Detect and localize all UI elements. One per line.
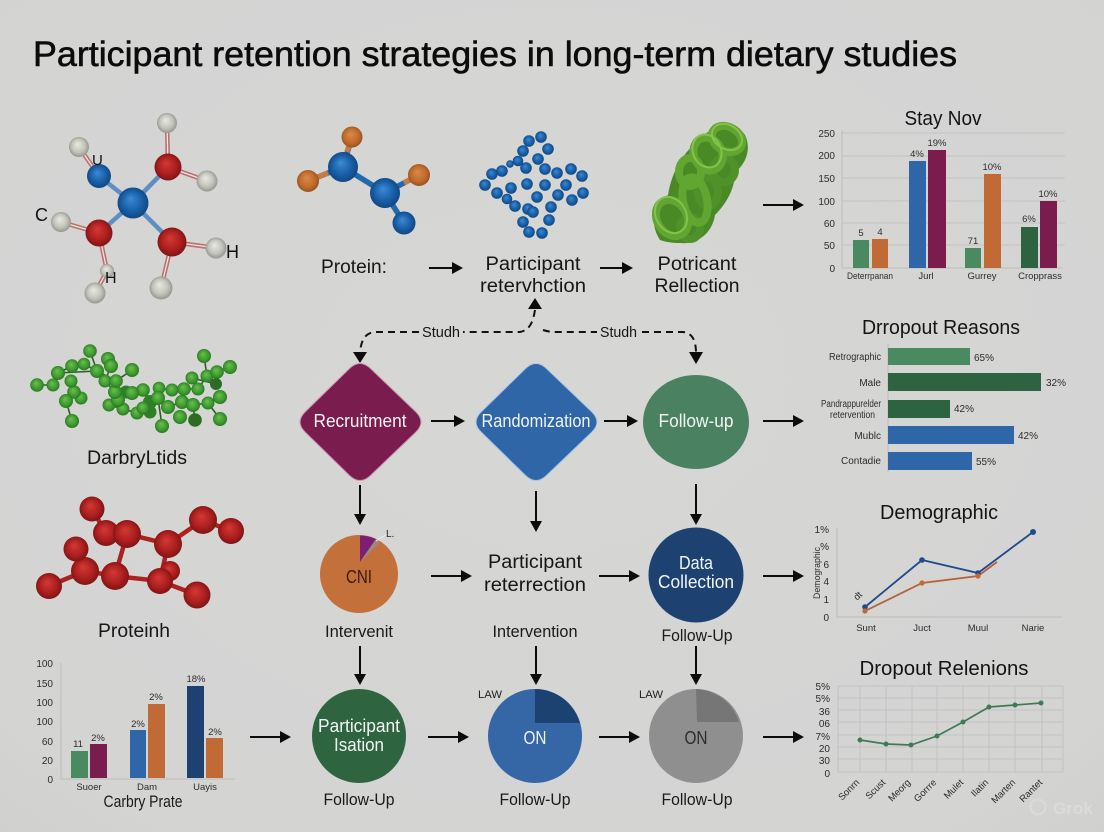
title: Participant retention strategies in long-term dietary studies bbox=[33, 35, 957, 74]
arrow: recruitment to randomization bbox=[431, 415, 465, 427]
flow node: Recruitment diamond: Recruitment bbox=[314, 411, 406, 431]
arrow: to Dropout Reasons chart bbox=[763, 415, 804, 427]
chart: Stay Nov grouped bars: Deterrpanan bbox=[847, 271, 893, 282]
label: Participant retervhction: retervhction bbox=[480, 276, 586, 297]
arrow: bar chart to participant isation bbox=[250, 731, 291, 743]
arrow: pie to participant bbox=[431, 570, 472, 582]
label: Participant retervhction: Participant bbox=[486, 254, 581, 275]
chart: Demographic line chart: dt bbox=[852, 589, 865, 603]
chart: Demographic line chart: Narie bbox=[1022, 623, 1044, 634]
pie chart: ON blue: LAW bbox=[478, 689, 503, 701]
chart: Dropout Relenions line chart: Dropout Relenions bbox=[860, 658, 1028, 680]
label: Follow-Up under data collection: Follow-Up bbox=[662, 626, 732, 645]
chart: Dropout Reasons horizontal bars: retervention bbox=[830, 410, 875, 421]
icon: small molecule with blue, red and grey atoms: U bbox=[92, 152, 103, 169]
pie chart: CNI: L. bbox=[386, 529, 394, 540]
chart: Stay Nov grouped bars: 10% bbox=[1038, 189, 1058, 200]
icon: small molecule with blue, red and grey atoms: H bbox=[226, 242, 239, 262]
chart: Stay Nov grouped bars: 50 bbox=[824, 241, 835, 252]
chart: Demographic line chart: Demographic bbox=[880, 502, 998, 524]
flow node: Follow-up ellipse bbox=[643, 375, 749, 469]
chart: Demographic line chart: Juct bbox=[913, 623, 931, 634]
flow node: Participant Isation circle bbox=[312, 689, 406, 783]
icon: protein molecule blue and orange bbox=[297, 126, 430, 234]
chart: Carbry Prate grouped bars: 2% bbox=[149, 692, 163, 703]
chart: Stay Nov grouped bars: Stay Nov bbox=[904, 108, 982, 130]
chart: Stay Nov grouped bars: 10% bbox=[982, 162, 1002, 173]
chart: Carbry Prate grouped bars: 2% bbox=[91, 733, 105, 744]
pie chart: CNI: CNI bbox=[346, 567, 372, 587]
label: Potricant Rellection: Rellection bbox=[654, 276, 740, 297]
chart: Dropout Relenions line chart: 5% bbox=[816, 694, 830, 705]
flow node: Data Collection circle bbox=[648, 528, 744, 622]
flow node: Follow-up ellipse: Follow-up bbox=[658, 411, 734, 431]
chart: Dropout Relenions line chart: Scust bbox=[864, 777, 888, 802]
icon: red molecule bbox=[36, 496, 244, 608]
chart: Carbry Prate grouped bars: 150 bbox=[36, 679, 53, 690]
chart: Dropout Relenions line chart bbox=[816, 658, 1063, 806]
arrow: to Stay Nov chart bbox=[763, 199, 804, 211]
arrow: blue pie to grey pie bbox=[599, 731, 640, 743]
icon: small molecule with blue, red and grey atoms bbox=[35, 113, 239, 304]
chart: Stay Nov grouped bars: 6% bbox=[1022, 214, 1036, 225]
pie chart: ON blue: ON bbox=[524, 728, 546, 748]
chart: Dropout Relenions line chart: 36 bbox=[819, 707, 830, 718]
chart: Carbry Prate grouped bars: 100 bbox=[36, 659, 53, 670]
chart: Dropout Relenions line chart: 7% bbox=[816, 732, 830, 743]
chart: Stay Nov grouped bars: 71 bbox=[968, 236, 978, 247]
chart: Dropout Reasons horizontal bars: Drropout Reasons bbox=[862, 317, 1020, 339]
chart: Dropout Relenions line chart: Mulet bbox=[942, 777, 966, 802]
chart: Dropout Relenions line chart: 06 bbox=[819, 719, 830, 730]
chart: Carbry Prate grouped bars: 2% bbox=[208, 727, 222, 738]
chart: Stay Nov grouped bars: 4 bbox=[877, 227, 883, 238]
chart: Demographic line chart: % bbox=[820, 542, 829, 553]
chart: Stay Nov grouped bars: Cropprass bbox=[1018, 271, 1062, 282]
chart: Demographic line chart: Sunt bbox=[856, 623, 876, 634]
chart: Dropout Relenions line chart: 20 bbox=[819, 744, 830, 755]
arrow: follow-up down bbox=[690, 484, 702, 525]
chart: Demographic line chart bbox=[812, 502, 1062, 634]
icon: small molecule with blue, red and grey atoms: C bbox=[35, 205, 48, 225]
chart: Dropout Reasons horizontal bars bbox=[821, 317, 1066, 472]
label: Proteinh: Proteinh bbox=[98, 621, 170, 642]
chart: Demographic line chart: 0 bbox=[823, 613, 829, 624]
flow node: Participant Isation circle: Participant bbox=[318, 716, 400, 736]
arrow: intervention down bbox=[530, 646, 542, 685]
arrow: intervenit down bbox=[354, 646, 366, 685]
chart: Dropout Reasons horizontal bars: 42% bbox=[1018, 431, 1038, 442]
label: Potricant Rellection: Potricant bbox=[658, 254, 737, 275]
flow node: Randomization diamond bbox=[476, 364, 597, 480]
arrow: randomization down bbox=[530, 491, 542, 532]
label: DarbryLtids: DarbryLtids bbox=[87, 448, 187, 469]
chart: Stay Nov grouped bars: 4% bbox=[910, 149, 924, 160]
chart: Stay Nov grouped bars: Jurl bbox=[918, 271, 934, 282]
chart: Dropout Reasons horizontal bars: 65% bbox=[974, 353, 994, 364]
chart: Demographic line chart: 6 bbox=[823, 560, 829, 571]
arrow: isation to blue pie bbox=[428, 731, 469, 743]
chart: Dropout Reasons horizontal bars: Mublc bbox=[854, 431, 881, 442]
chart: Dropout Reasons horizontal bars: 42% bbox=[954, 404, 974, 415]
chart: Carbry Prate grouped bars bbox=[36, 659, 235, 811]
flow node: Recruitment diamond bbox=[300, 364, 421, 480]
icon: green molecule cluster bbox=[30, 344, 237, 433]
chart: Demographic line chart: 1 bbox=[823, 595, 829, 606]
connector: dashed study links: Studh bbox=[600, 324, 637, 341]
chart: Dropout Reasons horizontal bars: Contadie bbox=[841, 456, 881, 467]
flow node: Data Collection circle: Collection bbox=[658, 572, 734, 592]
chart: Dropout Reasons horizontal bars: Pandrappurelder bbox=[821, 399, 882, 410]
label: Protein: Protein: bbox=[321, 257, 387, 278]
arrow: to Dropout Relenions chart bbox=[763, 731, 804, 743]
flow node: Participant Isation circle: Isation bbox=[334, 735, 384, 755]
arrow: protein to participant bbox=[429, 262, 463, 274]
chart: Carbry Prate grouped bars: 0 bbox=[47, 775, 53, 786]
chart: Carbry Prate grouped bars: 18% bbox=[186, 674, 206, 685]
chart: Demographic line chart: Demographic bbox=[812, 547, 823, 599]
chart: Demographic line chart: 1% bbox=[815, 525, 829, 536]
chart: Carbry Prate grouped bars: Uayis bbox=[193, 782, 217, 793]
chart: Dropout Reasons horizontal bars: 55% bbox=[976, 457, 996, 468]
pie chart: CNI bbox=[320, 529, 398, 613]
chart: Dropout Relenions line chart: 0 bbox=[824, 769, 830, 780]
chart: Dropout Reasons horizontal bars: Male bbox=[859, 378, 881, 389]
flow node: Data Collection circle: Data bbox=[679, 553, 714, 573]
label: Follow-Up left: Follow-Up bbox=[324, 790, 394, 809]
arrow: participant to data collection bbox=[599, 570, 640, 582]
chart: Stay Nov grouped bars: 100 bbox=[818, 197, 835, 208]
chart: Stay Nov grouped bars: 200 bbox=[818, 151, 835, 162]
arrow: follow-up down to grey circle bbox=[690, 646, 702, 685]
chart: Stay Nov grouped bars: 250 bbox=[818, 129, 835, 140]
label: Follow-Up middle: Follow-Up bbox=[500, 790, 570, 809]
chart: Carbry Prate grouped bars: 60 bbox=[42, 737, 53, 748]
chart: Dropout Relenions line chart: Gorrre bbox=[912, 777, 939, 805]
icon: blue dotted chain bbox=[479, 131, 589, 239]
chart: Stay Nov grouped bars: 5 bbox=[858, 228, 864, 239]
chart: Dropout Relenions line chart: Marten bbox=[989, 777, 1018, 806]
label: Intervention: Intervention bbox=[492, 622, 578, 641]
chart: Demographic line chart: Muul bbox=[968, 623, 988, 634]
label: Participant reterrection: reterrection bbox=[484, 575, 586, 596]
icon: small molecule with blue, red and grey atoms: H bbox=[105, 270, 117, 287]
connector: dashed study links: Studh bbox=[422, 324, 460, 341]
flow node: Randomization diamond: Randomization bbox=[482, 411, 590, 431]
chart: Stay Nov grouped bars: 60 bbox=[824, 219, 835, 230]
chart: Stay Nov grouped bars: Gurrey bbox=[967, 271, 997, 282]
chart: Carbry Prate grouped bars: 100 bbox=[36, 698, 53, 709]
connector: dashed study links bbox=[353, 298, 703, 364]
label: Follow-Up right: Follow-Up bbox=[662, 790, 732, 809]
chart: Dropout Reasons horizontal bars: Retrographic bbox=[829, 352, 881, 363]
label: Intervenit: Intervenit bbox=[325, 622, 393, 641]
arrow: participant to potricant bbox=[600, 262, 633, 274]
pie chart: ON grey: LAW bbox=[639, 689, 664, 701]
chart: Carbry Prate grouped bars: 20 bbox=[42, 756, 53, 767]
watermark: Grok bbox=[1030, 799, 1093, 818]
chart: Stay Nov grouped bars: 150 bbox=[818, 174, 835, 185]
chart: Dropout Relenions line chart: Ilatin bbox=[969, 777, 991, 799]
icon: green coiled protein bbox=[649, 119, 748, 243]
label: Participant reterrection: Participant bbox=[488, 552, 583, 573]
chart: Dropout Relenions line chart: 30 bbox=[819, 756, 830, 767]
pie chart: ON grey: ON bbox=[684, 728, 708, 748]
arrow: recruitment down bbox=[354, 485, 366, 525]
chart: Carbry Prate grouped bars: 100 bbox=[36, 717, 53, 728]
chart: Dropout Relenions line chart: Rantet bbox=[1018, 777, 1045, 805]
pie chart: ON blue bbox=[478, 689, 582, 783]
chart: Dropout Relenions line chart: 5% bbox=[816, 682, 830, 693]
watermark: Grok: Grok bbox=[1053, 799, 1093, 818]
chart: Stay Nov grouped bars: 0 bbox=[829, 264, 835, 275]
pie chart: ON grey bbox=[639, 689, 743, 783]
chart: Carbry Prate grouped bars: Suoer bbox=[76, 782, 102, 793]
chart: Dropout Relenions line chart: Meorg bbox=[886, 777, 913, 804]
arrow: randomization to follow-up bbox=[604, 415, 638, 427]
chart: Demographic line chart: 4 bbox=[823, 577, 829, 588]
chart: Carbry Prate grouped bars: Carbry Prate bbox=[104, 792, 182, 811]
chart: Carbry Prate grouped bars: 11 bbox=[73, 739, 83, 750]
chart: Carbry Prate grouped bars: 2% bbox=[131, 719, 145, 730]
chart: Dropout Reasons horizontal bars: 32% bbox=[1046, 378, 1066, 389]
arrow: to Demographic chart bbox=[763, 570, 804, 582]
chart: Stay Nov grouped bars: 19% bbox=[927, 138, 947, 149]
chart: Dropout Relenions line chart: Sonrn bbox=[836, 777, 862, 803]
chart: Stay Nov grouped bars bbox=[818, 108, 1065, 282]
chart: Carbry Prate grouped bars: Dam bbox=[137, 782, 157, 793]
